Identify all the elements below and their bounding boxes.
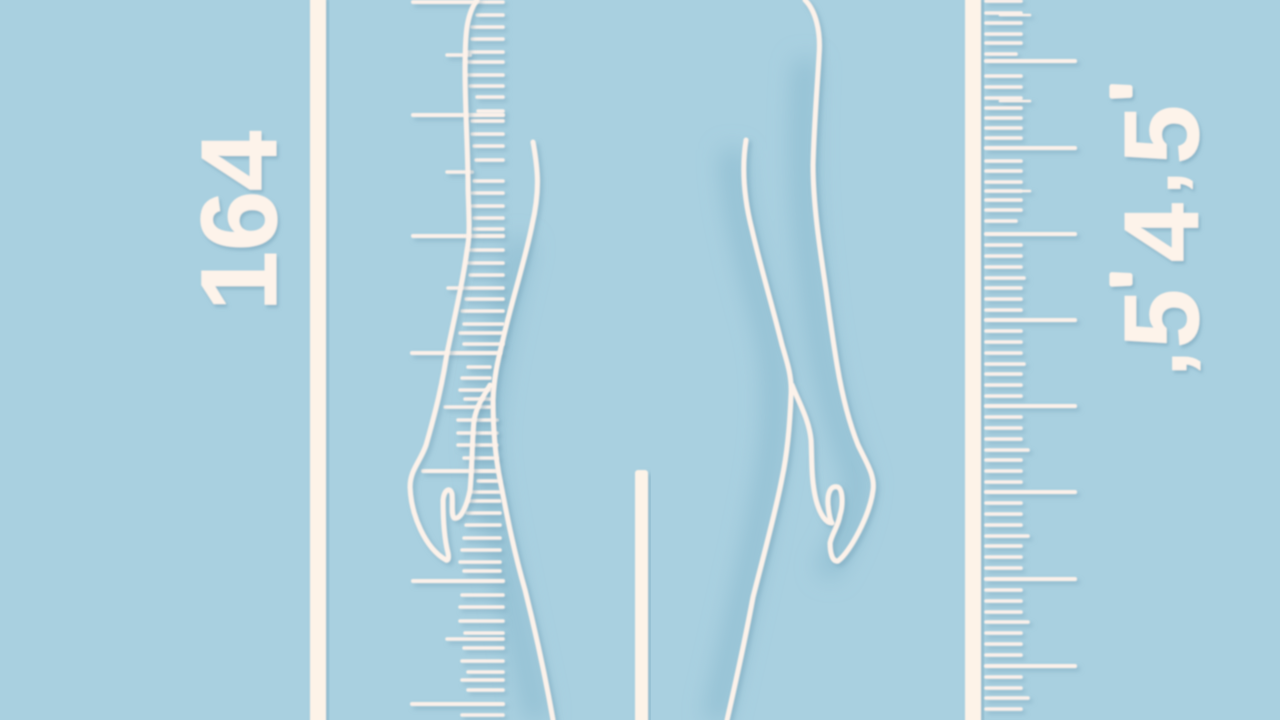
left arm outline <box>410 0 490 560</box>
center leg divider bar <box>635 470 648 720</box>
left vertical bar <box>310 0 326 720</box>
label: 5'4,5': ' <box>1098 83 1178 100</box>
label: 5'4,5': 5 <box>1103 105 1221 164</box>
label: 5'4,5': , <box>1106 351 1206 376</box>
label: 5'4,5': , <box>1108 172 1197 194</box>
label: 5'4,5': 4 <box>1103 203 1221 262</box>
label: 5'4,5' <box>1098 83 1221 376</box>
label: 5'4,5': 5 <box>1103 289 1221 348</box>
left ruler ticks <box>412 2 503 715</box>
body outline <box>410 0 873 720</box>
right ruler ticks <box>986 1 1075 709</box>
right arm outline <box>792 0 873 561</box>
left torso and leg line <box>493 142 553 720</box>
right vertical bar <box>965 0 981 720</box>
label: 164: 164 <box>178 131 299 311</box>
right torso and leg line <box>727 140 791 720</box>
label: 5'4,5': ' <box>1098 271 1178 288</box>
figure soft shadow <box>485 60 858 720</box>
